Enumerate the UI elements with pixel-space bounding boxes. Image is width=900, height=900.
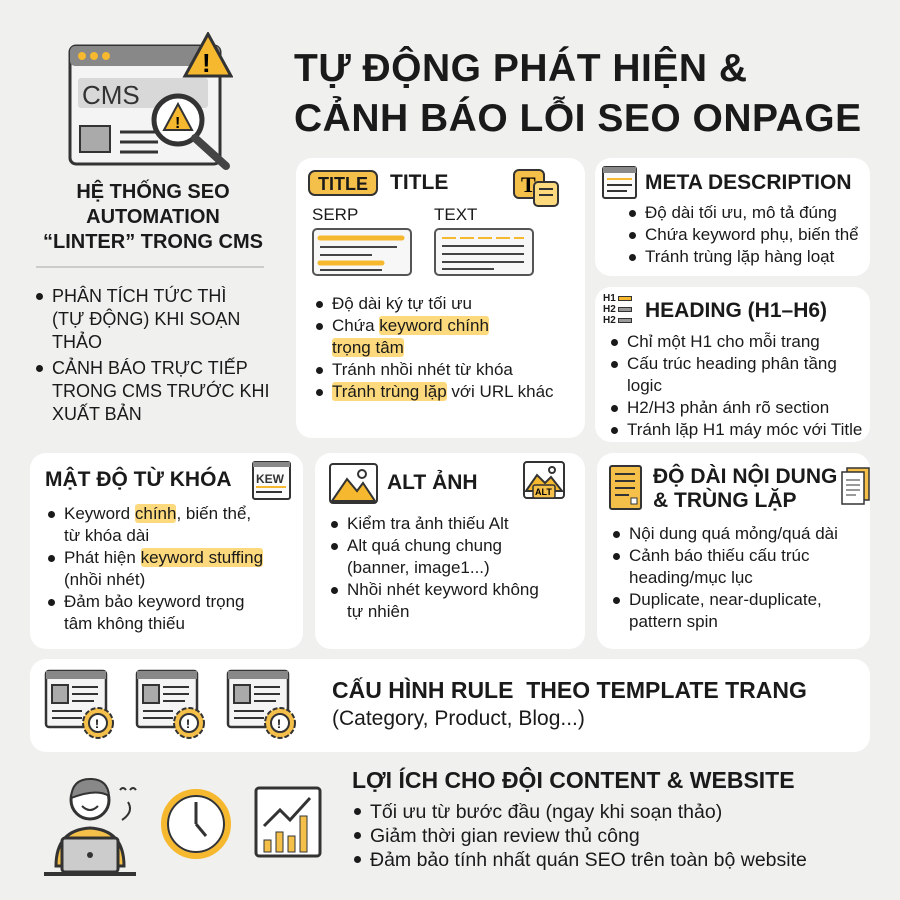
left bullets: PHÂN TÍCH TỨC THÌ xyxy=(52,286,226,306)
title badge: TITLE xyxy=(318,174,368,194)
panel: rule config: CẤU HÌNH RULE THEO TEMPLATE TRANG xyxy=(332,677,807,703)
icon: ALT image xyxy=(523,461,565,499)
left bullets: THẢO xyxy=(52,332,102,352)
benefits heading: LỢI ÍCH CHO ĐỘI CONTENT & WEBSITE xyxy=(352,767,795,793)
panel: meta description: Tránh trùng lặp hàng loạt xyxy=(645,247,834,266)
panel: content length: Cảnh báo thiếu cấu trúc heading/mục lục xyxy=(629,546,810,587)
icon: CMS window with warning: ! xyxy=(202,48,211,78)
panel: keyword density: Phát hiện keyword stuffing xyxy=(64,548,263,567)
panel: alt image: tự nhiên xyxy=(347,602,409,621)
serp box xyxy=(312,228,412,276)
panel: meta description: META DESCRIPTION xyxy=(645,171,852,194)
panel: alt image: Alt quá chung chung xyxy=(347,536,502,555)
panel: title: SERP xyxy=(312,205,358,224)
panel: heading xyxy=(595,287,870,442)
left bullets xyxy=(36,286,269,424)
icon: H1 H2: H1 xyxy=(603,293,616,304)
left heading xyxy=(43,180,263,253)
title bullets: Tránh nhồi nhét từ khóa xyxy=(332,360,513,379)
panel: alt image: ALT ẢNH xyxy=(387,471,478,494)
icon: person with laptop xyxy=(44,778,137,876)
panel: content length: Nội dung quá mỏng/quá dài xyxy=(629,524,838,543)
panel: rule config xyxy=(30,659,870,752)
panel: heading: HEADING (H1–H6) xyxy=(645,299,827,322)
panel: content length: ĐỘ DÀI NỘI DUNG xyxy=(653,465,837,488)
icon: CMS window with warning: CMS xyxy=(82,80,140,110)
icon: yellow doc xyxy=(609,465,642,510)
icon: chart xyxy=(254,786,322,858)
panel: heading: Cấu trúc heading phân tầng logic xyxy=(627,354,837,395)
panel: keyword density: MẬT ĐỘ TỪ KHÓA xyxy=(45,468,232,491)
panel: alt image: Nhồi nhét keyword không xyxy=(347,580,539,599)
panel: alt image: (banner, image1...) xyxy=(347,558,490,577)
title bullets: Chứa keyword chính xyxy=(332,316,489,335)
panel: heading: Tránh lặp H1 máy móc với Title xyxy=(627,420,862,439)
benefits bullets: Tối ưu từ bước đầu (ngay khi soạn thảo) xyxy=(370,801,722,823)
icon: H1 H2 xyxy=(603,293,632,326)
panel: title: TITLE xyxy=(390,171,448,194)
icon: CMS window with warning xyxy=(68,32,233,170)
icon: clock xyxy=(161,789,231,859)
title bullets: Độ dài ký tự tối ưu xyxy=(332,294,472,313)
title badge xyxy=(308,170,378,196)
panel: heading: Chỉ một H1 cho mỗi trang xyxy=(627,332,820,351)
icon: H1 H2: H2 xyxy=(603,304,616,315)
left heading: “LINTER” TRONG CMS xyxy=(43,231,263,253)
title: CẢNH BÁO LỖI SEO ONPAGE xyxy=(294,97,862,140)
left bullets: (TỰ ĐỘNG) KHI SOẠN xyxy=(52,309,240,329)
icon: CMS window with warning: ! xyxy=(175,115,180,132)
panel: meta description: Độ dài tối ưu, mô tả đúng xyxy=(645,203,837,222)
icon: KEW xyxy=(252,461,291,500)
left bullets: CẢNH BÁO TRỰC TIẾP xyxy=(52,358,248,378)
panel: heading: H2/H3 phản ánh rõ section xyxy=(627,398,829,417)
panel: keyword density: Keyword chính, biến thể, xyxy=(64,504,251,523)
title bullets xyxy=(316,294,554,401)
panel: content length xyxy=(597,453,870,649)
icon: KEW: KEW xyxy=(256,472,285,486)
icon: ALT image: ALT xyxy=(535,487,552,497)
icon: T doc xyxy=(513,169,559,207)
panel: content length: Duplicate, near-duplicate, pattern spin xyxy=(629,590,822,631)
title bullets: trọng tâm xyxy=(332,338,404,357)
left heading: HỆ THỐNG SEO AUTOMATION xyxy=(76,181,230,228)
left bullets: XUẤT BẢN xyxy=(52,404,142,424)
panel: meta description: Chứa keyword phụ, biến thể xyxy=(645,225,859,244)
benefits bullets: Đảm bảo tính nhất quán SEO trên toàn bộ website xyxy=(370,849,807,871)
panel: meta description xyxy=(595,158,870,276)
icon: docs xyxy=(841,467,870,505)
panel: keyword density: từ khóa dài xyxy=(64,526,149,545)
title xyxy=(294,46,862,140)
panel: keyword density xyxy=(30,453,303,649)
panel: alt image: Kiểm tra ảnh thiếu Alt xyxy=(347,514,509,533)
title bullets: Tránh trùng lặp với URL khác xyxy=(332,382,554,401)
icon: meta window xyxy=(602,166,637,199)
icons: templates with gears: ! xyxy=(95,717,99,731)
icon: image xyxy=(329,463,378,504)
panel: rule config: (Category, Product, Blog...) xyxy=(332,707,585,730)
icons: templates with gears xyxy=(44,670,296,739)
benefits bullets: Giảm thời gian review thủ công xyxy=(370,825,640,847)
icon: T doc: T xyxy=(521,172,536,197)
panel: title: TEXT xyxy=(434,205,477,224)
left bullets: TRONG CMS TRƯỚC KHI xyxy=(52,381,269,401)
panel: title xyxy=(296,158,585,438)
title: TỰ ĐỘNG PHÁT HIỆN & xyxy=(294,47,748,90)
panel: keyword density: Đảm bảo keyword trọng xyxy=(64,592,244,611)
text box xyxy=(434,228,534,276)
benefits bullets xyxy=(354,801,807,871)
panel: alt image xyxy=(315,453,585,649)
panel: content length: & TRÙNG LẶP xyxy=(653,489,796,512)
icon: H1 H2: H2 xyxy=(603,315,616,326)
panel: keyword density: (nhồi nhét) xyxy=(64,570,145,589)
panel: keyword density: tâm không thiếu xyxy=(64,614,185,633)
